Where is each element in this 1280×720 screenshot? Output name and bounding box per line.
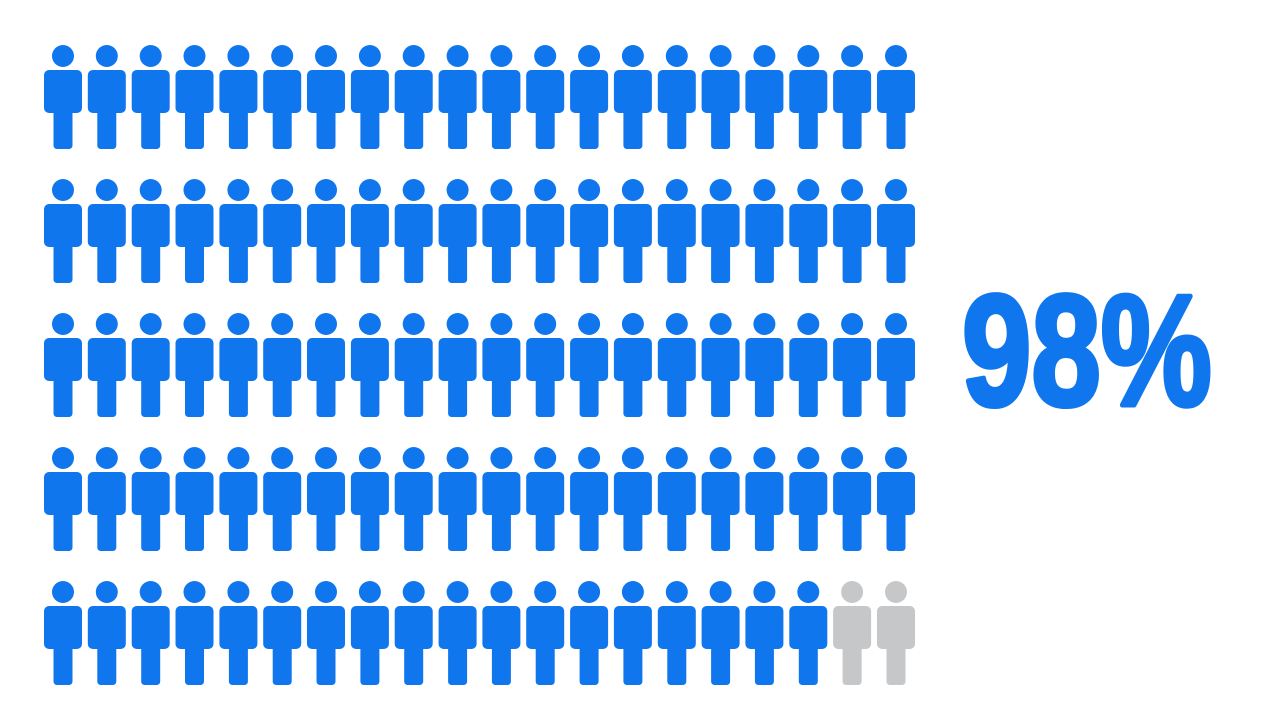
- grey remainder icons: [833, 581, 915, 685]
- percentage label: 98%: [962, 263, 1212, 439]
- row 2: [44, 179, 915, 283]
- row 4: [44, 447, 915, 551]
- people grid: [44, 45, 915, 685]
- row 1: [44, 45, 915, 149]
- row 3: [44, 313, 915, 417]
- row 5: [44, 581, 915, 685]
